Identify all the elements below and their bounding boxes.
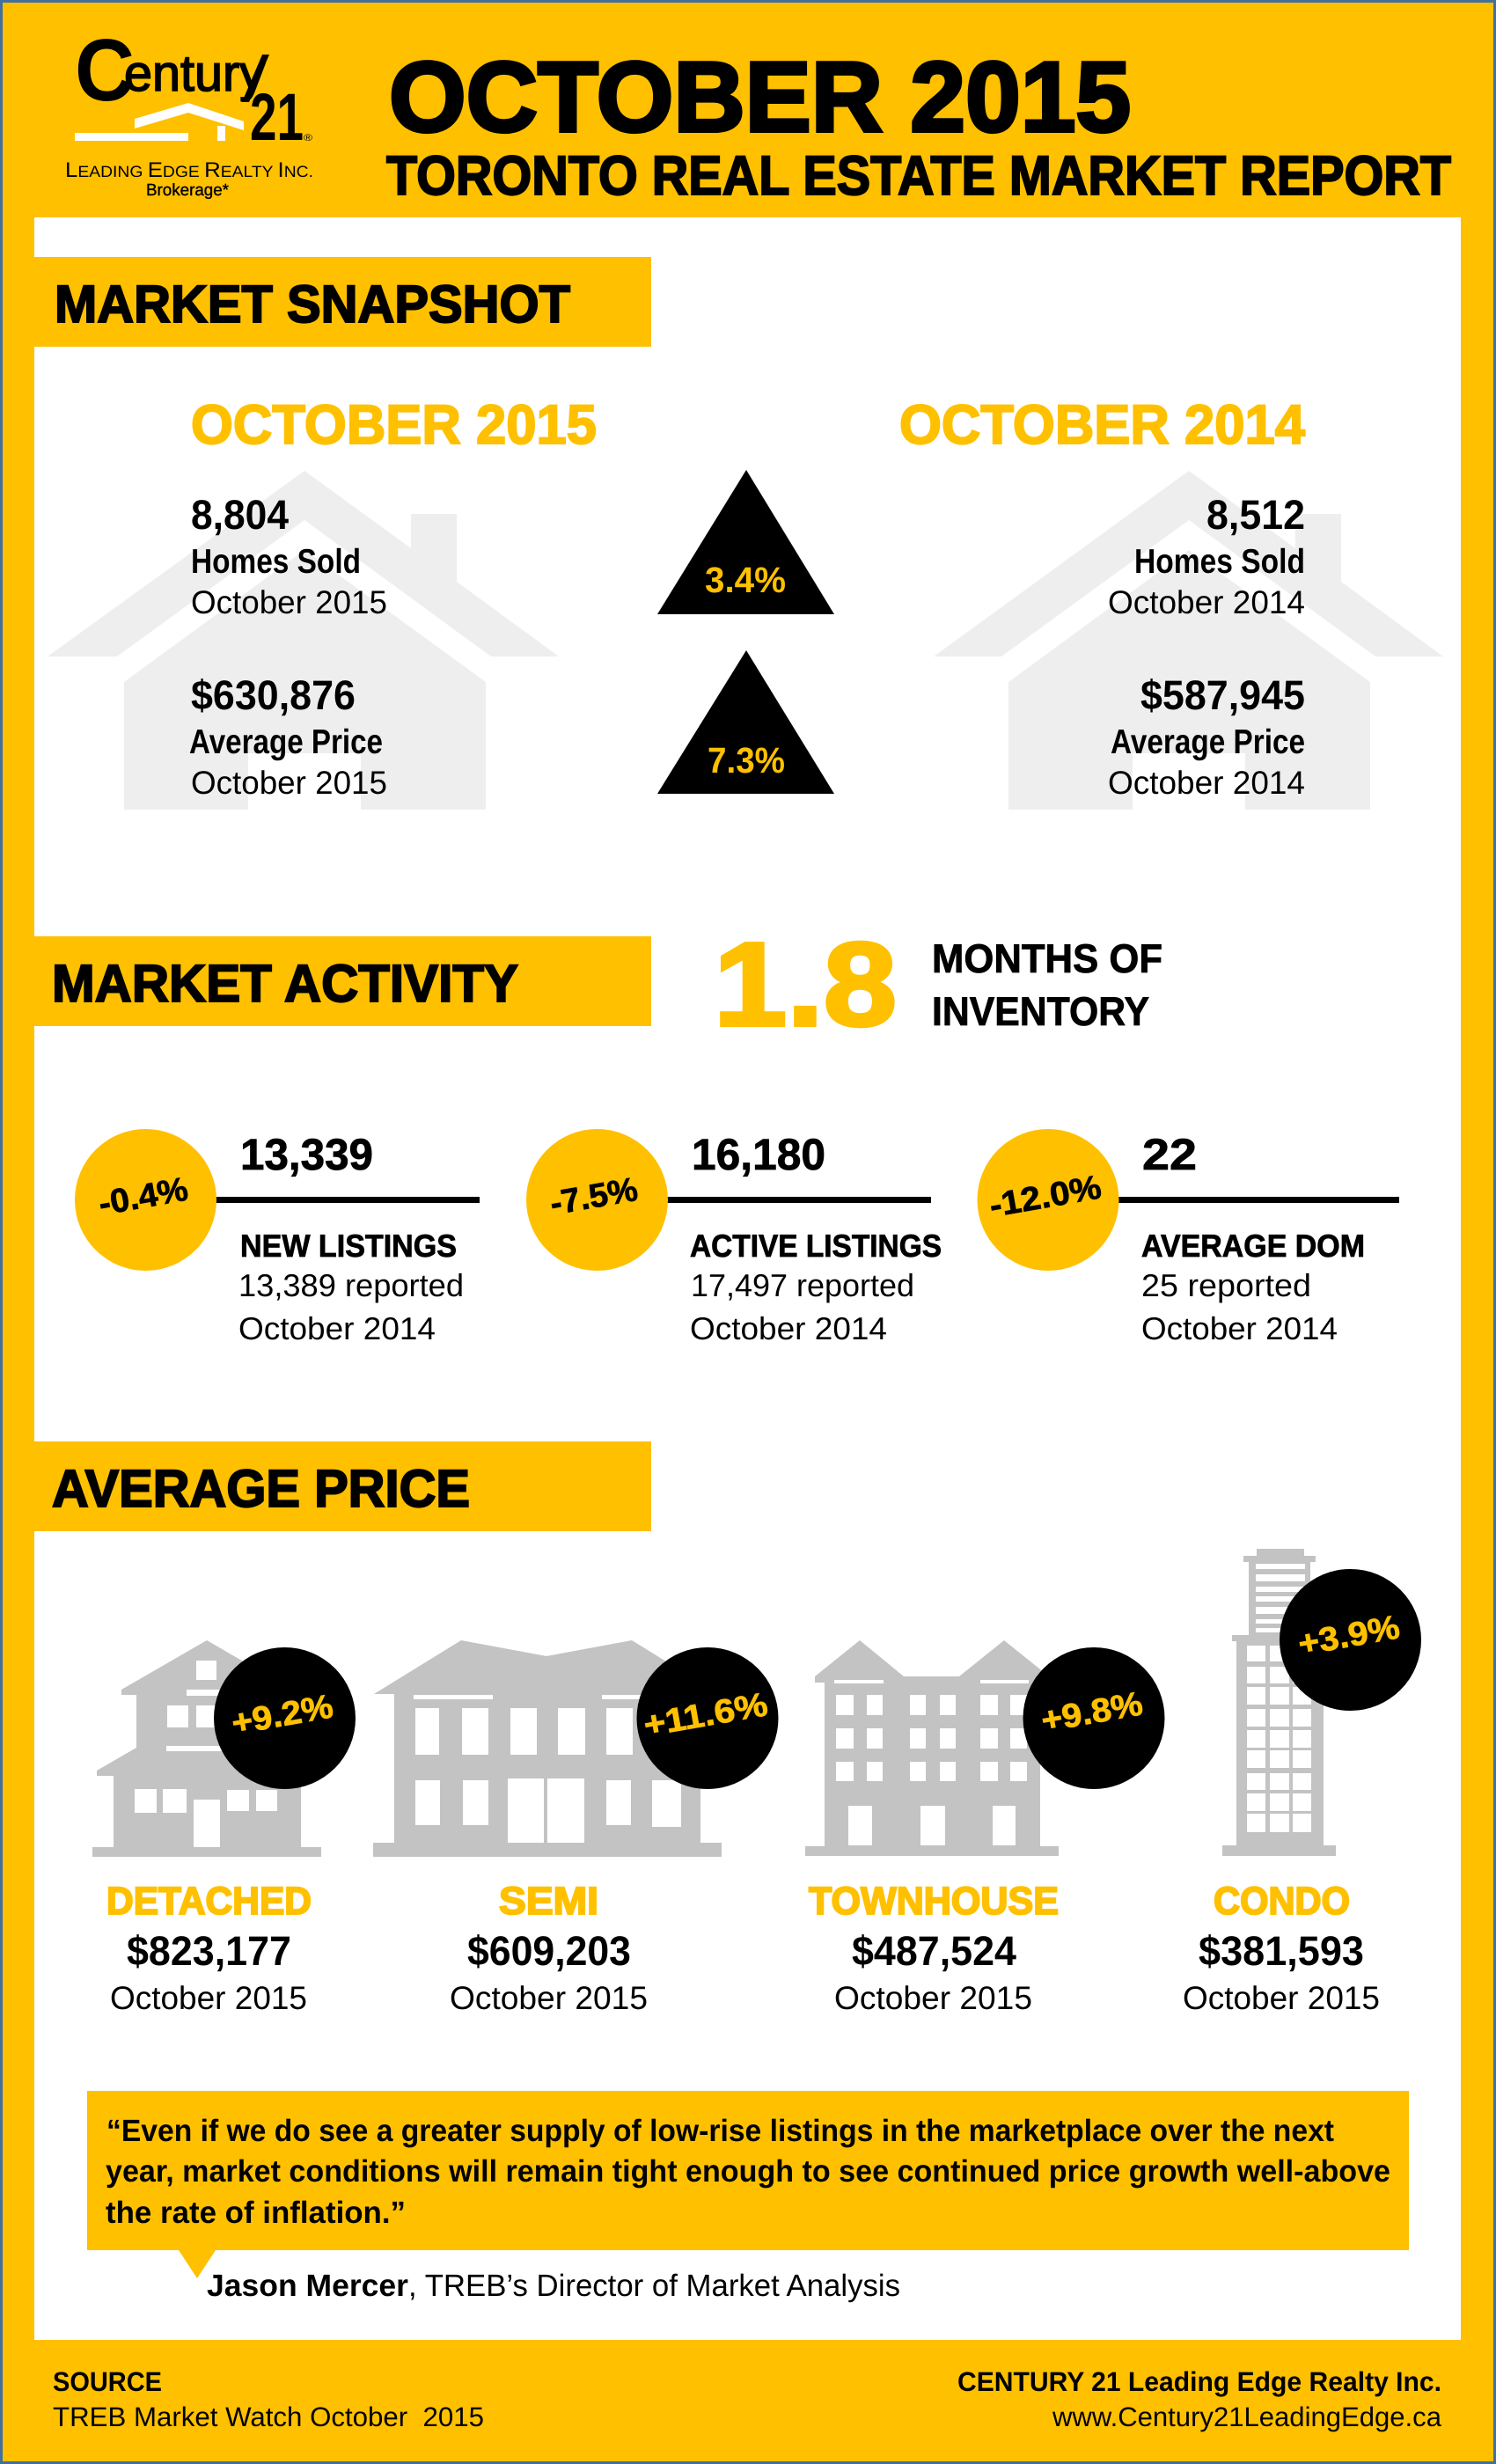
metric: new listings: NEW LISTINGS — [240, 1228, 457, 1264]
label block: condo — [1183, 1880, 1380, 2016]
section heading band: market snapshot — [34, 257, 651, 347]
icon: townhouse — [805, 1640, 1059, 1856]
label block: semi — [450, 1880, 648, 2016]
section heading band: market activity — [34, 936, 651, 1026]
panel: market activity — [34, 918, 1399, 1346]
stats: October 2015: October 2015 — [191, 584, 387, 620]
callout: quote — [87, 2091, 1409, 2278]
badge: semi change: +11.6% — [641, 1686, 770, 1744]
footer: company — [957, 2366, 1442, 2432]
metric: active listings: -7.5% — [547, 1171, 641, 1223]
logo: Century 21 Leading Edge: C — [75, 21, 135, 120]
badge: condo change: +3.9% — [1295, 1609, 1403, 1663]
metric: average DOM — [977, 1129, 1399, 1346]
callout: quote: the rate of inflation.” — [106, 2196, 406, 2230]
metric: new listings: October 2014 — [238, 1310, 436, 1346]
label block: townhouse — [809, 1880, 1059, 2016]
label block: condo: $381,593 — [1199, 1927, 1364, 1974]
metric: active listings: ACTIVE LISTINGS — [690, 1228, 942, 1264]
icon: up triangle average price — [657, 650, 834, 794]
stats: October 2015: October 2015 — [191, 765, 387, 801]
footer: source — [53, 2366, 484, 2432]
label block: condo: October 2015 — [1183, 1980, 1380, 2016]
footer: company: www.Century21LeadingEdge.ca — [1052, 2402, 1442, 2432]
metric: new listings: 13,339 — [240, 1130, 373, 1179]
metric: active listings — [526, 1129, 942, 1346]
logo: Century 21 Leading Edge: Brokerage* — [146, 181, 230, 200]
metric: active listings: 17,497 reported — [691, 1267, 914, 1303]
label block: detached: DETACHED — [106, 1880, 312, 1923]
badge: semi change — [637, 1647, 778, 1789]
badge: detached change — [214, 1647, 356, 1789]
label block: detached — [106, 1880, 312, 2016]
badge: detached change: +9.2% — [229, 1688, 336, 1742]
stat: months of inventory: MONTHS OF — [932, 935, 1162, 981]
metric: average DOM: October 2014 — [1141, 1310, 1338, 1346]
badge: townhouse change — [1023, 1647, 1165, 1789]
label block: townhouse: TOWNHOUSE — [809, 1880, 1059, 1923]
metric: new listings: 13,389 reported — [238, 1267, 464, 1303]
logo: Century 21 Leading Edge: ® — [304, 133, 312, 143]
stats: October 2014: Homes Sold — [1134, 543, 1305, 581]
callout: quote: “Even if we do see a greater supply of low-rise listings in the marketplace over the next — [106, 2114, 1334, 2148]
stats: October 2015: $630,876 — [191, 671, 356, 718]
stats: October 2014: October 2014 — [1108, 765, 1305, 801]
label block: condo: CONDO — [1214, 1880, 1350, 1923]
stats: October 2015: Average Price — [189, 723, 383, 761]
stats: October 2015 — [189, 491, 387, 801]
stats: October 2014: 8,512 — [1206, 491, 1305, 538]
panel: market snapshot — [34, 257, 1443, 810]
logo: Century 21 Leading Edge: entury — [124, 45, 265, 102]
icon: house watermark left — [48, 471, 559, 810]
heading: October 2014 column: OCTOBER 2014 — [899, 394, 1305, 456]
section heading band: average price: AVERAGE PRICE — [52, 1459, 470, 1518]
quote attribution: Jason Mercer — [207, 2269, 408, 2303]
heading: October 2015 column: OCTOBER 2015 — [191, 394, 597, 456]
section heading band: market activity: MARKET ACTIVITY — [52, 954, 518, 1013]
callout: quote: year, market conditions will remain tight enough to see continued price growth well-above — [106, 2154, 1390, 2189]
label block: detached: $823,177 — [127, 1927, 291, 1974]
stat: months of inventory: 1.8 — [714, 918, 897, 1051]
metric: average DOM: 25 reported — [1141, 1267, 1311, 1303]
icon: up triangle homes sold: 3.4% — [705, 560, 786, 600]
metric: active listings: October 2014 — [690, 1310, 887, 1346]
icon: semi-detached house — [373, 1640, 722, 1857]
logo: Century 21 Leading Edge: 21 — [250, 80, 304, 155]
metric: active listings: 16,180 — [692, 1130, 825, 1179]
metric: average DOM: AVERAGE DOM — [1141, 1228, 1365, 1264]
stats: October 2014: $587,945 — [1140, 671, 1305, 718]
footer: company: CENTURY 21 Leading Edge Realty Inc. — [957, 2366, 1441, 2397]
logo: Century 21 Leading Edge — [65, 21, 313, 200]
label block: townhouse: October 2015 — [834, 1980, 1032, 2016]
label block: semi: October 2015 — [450, 1980, 648, 2016]
metric: new listings: -0.4% — [96, 1171, 191, 1223]
icon: detached house — [92, 1640, 321, 1857]
stats: October 2014: Average Price — [1111, 723, 1305, 761]
title: OCTOBER 2015 — [389, 41, 1131, 152]
label block: semi: SEMI — [499, 1880, 598, 1923]
stat: months of inventory: INVENTORY — [932, 988, 1149, 1034]
icon: up triangle average price: 7.3% — [708, 740, 785, 781]
label block: townhouse: $487,524 — [852, 1927, 1016, 1974]
label block: semi: $609,203 — [467, 1927, 631, 1974]
icon: house watermark right — [934, 471, 1443, 810]
metric: new listings — [75, 1129, 480, 1346]
section heading band: average price — [34, 1441, 651, 1531]
stat: months of inventory — [714, 918, 1162, 1051]
footer: source: TREB Market Watch October 2015 — [53, 2402, 484, 2432]
stats: October 2014: October 2014 — [1108, 584, 1305, 620]
badge: condo change — [1280, 1569, 1421, 1711]
stats: October 2015: Homes Sold — [191, 543, 361, 581]
metric: average DOM: 22 — [1142, 1130, 1197, 1179]
stats: October 2015: 8,804 — [191, 491, 289, 538]
badge: townhouse change: +9.8% — [1038, 1685, 1146, 1740]
quote attribution: , TREB’s Director of Market Analysis — [408, 2269, 900, 2303]
panel: average price — [34, 1441, 1421, 2016]
section heading band: market snapshot: MARKET SNAPSHOT — [55, 275, 570, 334]
logo: Century 21 Leading Edge: LEADING EDGE REALTY INC. — [65, 158, 313, 182]
label block: detached: October 2015 — [110, 1980, 307, 2016]
icon: condo tower — [1222, 1549, 1336, 1856]
metric: average DOM: -12.0% — [986, 1169, 1104, 1225]
footer: source: SOURCE — [53, 2366, 162, 2397]
stats: October 2014 — [1108, 491, 1305, 801]
icon: up triangle homes sold — [657, 470, 834, 614]
